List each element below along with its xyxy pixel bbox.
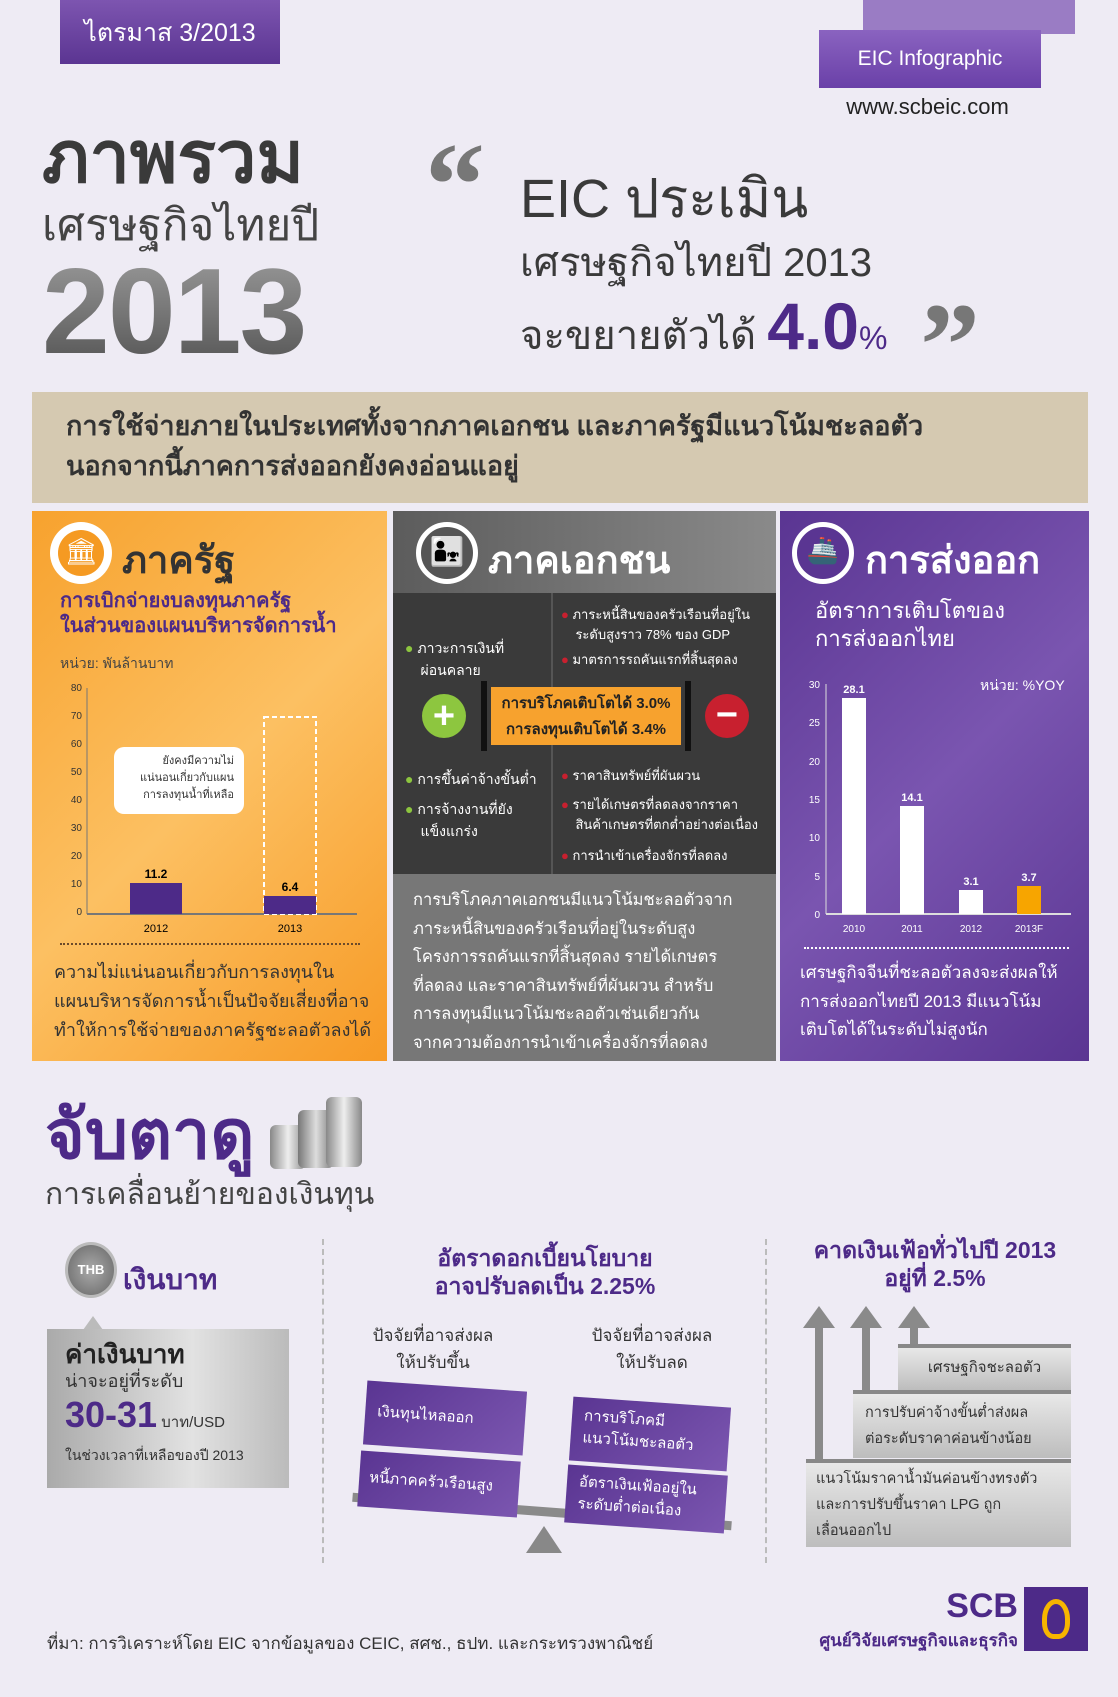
section: policy rate: ให้ปรับขึ้น <box>396 1353 470 1372</box>
bar chart: investment: 0 <box>76 907 82 918</box>
title block: ภาพรวม <box>42 118 304 198</box>
section: inflation: เลื่อนออกไป <box>816 1523 891 1539</box>
subtitle: การเบิกจ่ายงบลงทุนภาครัฐ <box>60 590 291 612</box>
section: inflation: ต่อระดับราคาค่อนข้างน้อย <box>865 1431 1032 1447</box>
diagram: seesaw: ระดับต่ำต่อเนื่อง <box>577 1495 682 1519</box>
diagram: seesaw: อัตราเงินเฟ้ออยู่ใน <box>578 1473 697 1499</box>
heading: อัตราดอกเบี้ยนโยบาย <box>437 1245 653 1271</box>
bar chart: investment: 2012 <box>144 923 168 935</box>
bar chart: exports: 10 <box>809 833 820 844</box>
bar chart: exports: 15 <box>809 795 820 806</box>
callout: growth <box>481 681 691 751</box>
title block: 2013 <box>42 243 305 379</box>
title block: เศรษฐกิจไทยปี <box>42 201 319 250</box>
section: inflation: แนวโน้มราคาน้ำมันค่อนข้างทรงตัว <box>816 1471 1037 1487</box>
factors box: ● รายได้เกษตรที่ลดลงจากราคา <box>561 797 738 812</box>
heading: ภาครัฐ <box>122 540 235 582</box>
text: government note <box>54 960 371 1041</box>
text: private note <box>413 890 732 1052</box>
factors box: แข็งแกร่ง <box>421 823 478 839</box>
banner: summary: นอกจากนี้ภาคการส่งออกยังคงอ่อนแอยู่ <box>66 451 519 481</box>
bar chart: exports <box>809 680 1071 935</box>
factors box <box>393 593 776 874</box>
bar chart: exports: 2011 <box>901 924 923 935</box>
section: baht <box>47 1242 289 1488</box>
tab: quarter: ไตรมาส 3/2013 <box>84 19 256 47</box>
icon: building <box>50 522 112 584</box>
text: government note: แผนบริหารจัดการน้ำเป็นปัจจัยเสี่ยงที่อาจ <box>54 991 369 1011</box>
callout: แน่นอนเกี่ยวกับแผน <box>140 772 234 784</box>
quote: headline <box>425 118 980 411</box>
bar chart: exports: 0 <box>814 910 820 921</box>
bar chart: exports: 14.1 <box>901 792 923 804</box>
section: inflation: การปรับค่าจ้างขั้นต่ำส่งผล <box>865 1405 1028 1421</box>
ribbon: EIC Infographic <box>819 0 1075 88</box>
bar chart: investment: 20 <box>71 851 82 862</box>
unit: หน่วย: %YOY <box>980 677 1065 693</box>
icon: minus: − <box>716 694 738 736</box>
subtitle: ในส่วนของแผนบริหารจัดการน้ำ <box>60 615 337 637</box>
icon: THB coin <box>65 1242 117 1298</box>
factors box: ● การขึ้นค่าจ้างขั้นต่ำ <box>405 771 537 787</box>
heading: watch <box>45 1097 374 1212</box>
bar chart: exports: 2010 <box>843 924 866 935</box>
icon: ship: 🚢 <box>807 535 839 565</box>
bar chart: investment: 50 <box>71 767 82 778</box>
section: policy rate: ปัจจัยที่อาจส่งผล <box>592 1326 712 1345</box>
bar chart: investment: 2013 <box>278 923 302 935</box>
factors box: สินค้าเกษตรที่ตกต่ำอย่างต่อเนื่อง <box>575 817 758 832</box>
steps: เศรษฐกิจชะลอตัว <box>928 1359 1041 1376</box>
bar chart: exports: 2012 <box>960 924 983 935</box>
diagram: seesaw: แนวโน้มชะลอตัว <box>582 1429 694 1454</box>
box: baht forecast: ในช่วงเวลาที่เหลือของปี 2013 <box>65 1447 244 1463</box>
text: exports note: เศรษฐกิจจีนที่ชะลอตัวลงจะส่งผลให้ <box>800 963 1058 982</box>
icon: minus <box>705 694 749 738</box>
subtitle: การส่งออกไทย <box>815 626 955 651</box>
bar chart: exports: 2013F <box>1015 924 1043 935</box>
icon: building: 🏛 <box>64 536 98 566</box>
factors box: ● มาตรการรถคันแรกที่สิ้นสุดลง <box>561 652 738 667</box>
bar chart: investment <box>71 683 357 935</box>
heading: ภาคเอกชน <box>488 540 670 582</box>
bar chart: investment: 40 <box>71 795 82 806</box>
footer: source: ที่มา: การวิเคราะห์โดย EIC จากข้อมูลของ CEIC, สศช., ธปท. และกระทรวงพาณิชย์ <box>47 1634 653 1653</box>
icon: plus: + <box>433 695 455 737</box>
diagram: seesaw: เงินทุนไหลออก <box>377 1403 474 1427</box>
diagram: seesaw <box>352 1380 732 1553</box>
tab: quarter <box>60 0 280 64</box>
text: private note: การบริโภคภาคเอกชนมีแนวโน้มชะลอตัวจาก <box>413 891 732 909</box>
text: private note: ภาระหนี้สินของครัวเรือนที่อยู่ในระดับสูง <box>413 920 695 938</box>
banner: summary <box>32 392 1088 503</box>
text: private note: จากความต้องการนำเข้าเครื่องจักรที่ลดลง <box>413 1034 708 1052</box>
section: inflation <box>803 1234 1071 1547</box>
text: government note: ความไม่แน่นอนเกี่ยวกับการลงทุนใน <box>54 962 334 982</box>
banner: summary: การใช้จ่ายภายในประเทศทั้งจากภาคเอกชน และภาครัฐมีแนวโน้มชะลอตัว <box>66 411 923 441</box>
box: baht forecast: น่าจะอยู่ที่ระดับ <box>65 1371 183 1391</box>
heading: การส่งออก <box>865 540 1040 582</box>
quote: headline: “ <box>425 118 485 251</box>
heading: watch: การเคลื่อนย้ายของเงินทุน <box>45 1178 374 1211</box>
bar chart: exports: 28.1 <box>843 684 865 696</box>
heading: watch: จับตาดู <box>45 1097 255 1173</box>
factors box: ● ราคาสินทรัพย์ที่ผันผวน <box>561 768 700 783</box>
text: private note: ที่ลดลง และราคาสินทรัพย์ที่ผันผวน สำหรับ <box>413 976 713 994</box>
logo: SCB: ศูนย์วิจัยเศรษฐกิจและธุรกิจ <box>819 1631 1018 1650</box>
quote: headline: เศรษฐกิจไทยปี 2013 <box>520 241 872 285</box>
callout: growth: การลงทุนเติบโตได้ 3.4% <box>506 721 666 738</box>
text: government note: ทำให้การใช้จ่ายของภาครัฐชะลอตัวลงได้ <box>54 1020 371 1040</box>
icon: THB coin: THB <box>78 1262 104 1277</box>
icon: family <box>416 522 478 584</box>
bar chart: exports: 3.1 <box>963 876 979 888</box>
panel: government <box>32 511 387 1061</box>
text: exports note: การส่งออกไทยปี 2013 มีแนวโน้ม <box>800 992 1041 1010</box>
subtitle <box>60 590 337 637</box>
bar chart: investment: 80 <box>71 683 82 694</box>
heading <box>435 1241 655 1299</box>
callout: การลงทุนน้ำที่เหลือ <box>143 789 234 801</box>
heading <box>814 1234 1056 1292</box>
bar chart: investment: 10 <box>71 879 82 890</box>
text: exports note <box>800 960 1058 1040</box>
bar chart: investment: 11.2 <box>145 867 168 881</box>
logo: SCB: SCB <box>946 1587 1018 1625</box>
callout: growth: การบริโภคเติบโตได้ 3.0% <box>502 695 670 712</box>
factors box: ผ่อนคลาย <box>421 662 481 678</box>
factors box: ● การจ้างงานที่ยัง <box>405 801 513 817</box>
icon: coins <box>270 1097 362 1169</box>
text: exports note: เติบโตได้ในระดับไม่สูงนัก <box>800 1020 988 1039</box>
arrows <box>803 1306 930 1459</box>
subtitle <box>815 598 1005 651</box>
box: baht forecast <box>47 1329 289 1488</box>
bar chart: exports: 3.7 <box>1021 872 1037 884</box>
section: policy rate: ให้ปรับลด <box>616 1353 688 1372</box>
panel: private sector <box>393 511 776 1061</box>
section: policy rate <box>352 1241 732 1553</box>
factors box: ● การนำเข้าเครื่องจักรที่ลดลง <box>561 848 727 863</box>
title block <box>42 118 319 379</box>
steps <box>898 1344 1071 1390</box>
heading: อยู่ที่ 2.5% <box>884 1265 986 1291</box>
bar chart: investment: 6.4 <box>282 880 299 894</box>
bar chart: exports: 20 <box>809 757 820 768</box>
quote: headline: ” <box>920 278 980 411</box>
section: inflation: และการปรับขึ้นราคา LPG ถูก <box>816 1497 1001 1513</box>
bar chart: investment: 70 <box>71 711 82 722</box>
text: private note: โครงการรถคันแรกที่สิ้นสุดลง รายได้เกษตร <box>413 948 717 966</box>
section: baht: เงินบาท <box>123 1264 217 1295</box>
heading: อาจปรับลดเป็น 2.25% <box>435 1273 655 1299</box>
quote: headline: จะขยายตัวได้ 4.0% <box>520 289 887 363</box>
diagram: seesaw: หนี้ภาคครัวเรือนสูง <box>369 1469 494 1495</box>
callout: ยังคงมีความไม่ <box>162 755 234 767</box>
icon: family: 👨‍👧 <box>430 536 464 567</box>
bar chart: investment: 30 <box>71 823 82 834</box>
factors box: ● ภาระหนี้สินของครัวเรือนที่อยู่ใน <box>561 607 750 622</box>
box: baht forecast: ค่าเงินบาท <box>65 1339 185 1369</box>
unit: หน่วย: พันล้านบาท <box>60 655 173 671</box>
bar chart: exports: 5 <box>814 872 820 883</box>
ribbon: EIC Infographic: EIC Infographic <box>858 47 1002 70</box>
heading: คาดเงินเฟ้อทั่วไปปี 2013 <box>814 1237 1056 1263</box>
bar chart: exports: 25 <box>809 718 820 729</box>
bar chart: investment: 60 <box>71 739 82 750</box>
callout <box>114 747 244 814</box>
panel: exports <box>780 511 1089 1061</box>
icon: ship <box>792 522 854 584</box>
text: private note: การลงทุนมีแนวโน้มชะลอตัวเช่นเดียวกัน <box>413 1005 699 1023</box>
icon: plus <box>422 694 466 738</box>
website: www.scbeic.com <box>846 94 1009 119</box>
logo: SCB <box>819 1587 1088 1652</box>
bar chart: exports: 30 <box>809 680 820 691</box>
factors box: ● ภาวะการเงินที่ <box>405 640 504 656</box>
subtitle: อัตราการเติบโตของ <box>815 598 1005 623</box>
section: policy rate: ปัจจัยที่อาจส่งผล <box>373 1326 493 1345</box>
quote: headline: EIC ประเมิน <box>520 169 808 229</box>
box: baht forecast: 30-31 บาท/USD <box>65 1394 225 1435</box>
factors box: ระดับสูงราว 78% ของ GDP <box>575 627 730 642</box>
diagram: seesaw: การบริโภคมี <box>584 1407 666 1430</box>
